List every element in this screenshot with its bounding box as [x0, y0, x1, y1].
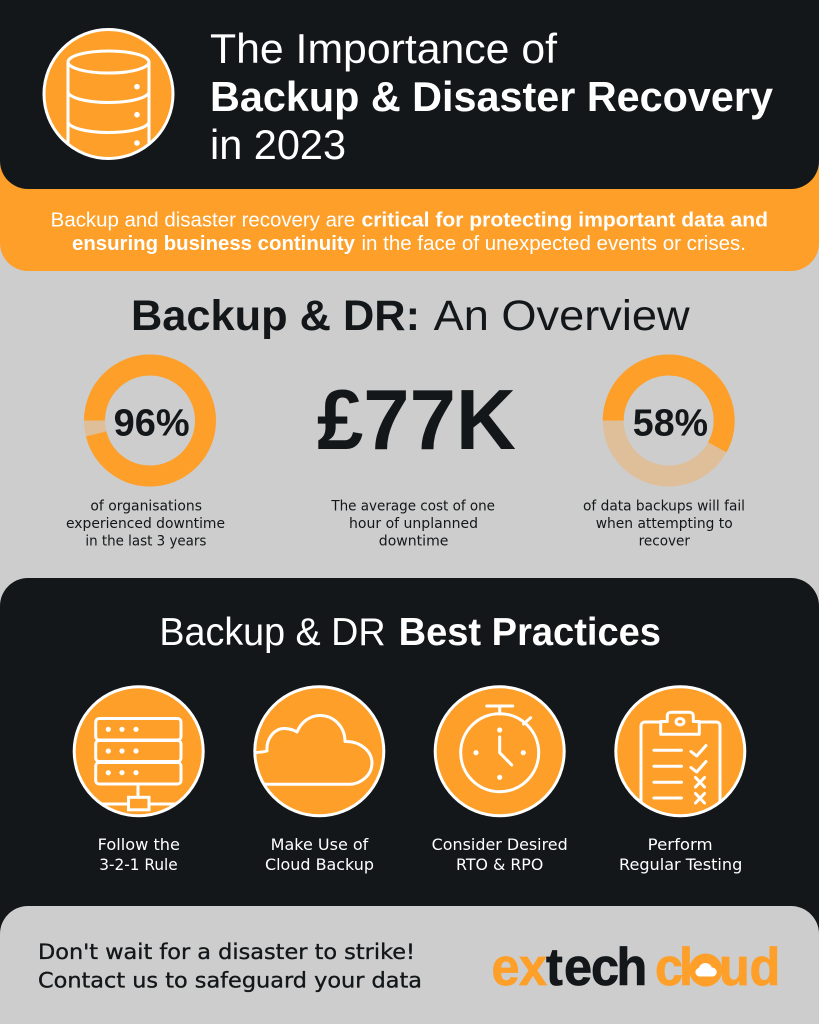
icon: database: [44, 30, 173, 160]
label: cloud backup: Cloud Backup: [265, 856, 374, 874]
caption: 96%: experienced downtime: [66, 516, 225, 532]
heading: overview: Backup & DR:: [131, 292, 420, 340]
label: regular testing: Regular Testing: [619, 856, 742, 874]
icon: logo cloud: [689, 954, 722, 986]
intro text: in the face of unexpected events or crises.: [362, 233, 746, 255]
panel: call to action: [0, 906, 819, 1024]
icon: server: [74, 687, 203, 816]
label: regular testing: [619, 836, 742, 874]
label: 3-2-1 rule: Follow the: [98, 836, 180, 854]
intro text: Backup and disaster recovery are: [51, 210, 355, 232]
logo: extech cloud: tech: [546, 937, 647, 996]
intro text: critical for protecting important data and: [362, 210, 768, 232]
logo: extech cloud: [492, 937, 780, 996]
caption: 58%: of data backups will fail: [583, 498, 745, 514]
title: [210, 25, 774, 168]
stat: 96% donut: 96%: [114, 402, 190, 444]
icon: cloud: [250, 687, 384, 816]
label: 3-2-1 rule: 3-2-1 Rule: [99, 856, 178, 874]
label: regular testing: Perform: [648, 836, 713, 854]
label: RTO and RPO: Consider Desired: [432, 836, 568, 854]
title: in 2023: [210, 121, 346, 168]
label: RTO and RPO: RTO & RPO: [456, 856, 543, 874]
label: RTO and RPO: [432, 836, 568, 874]
label: cloud backup: Make Use of: [271, 836, 369, 854]
caption: cost: downtime: [379, 534, 448, 550]
logo: extech cloud: cloud: [655, 937, 780, 996]
call to action text: Contact us to safeguard your data: [38, 968, 422, 992]
logo: extech cloud: ex: [492, 937, 547, 996]
intro text: [51, 210, 768, 255]
caption: cost: The average cost of one: [330, 498, 495, 514]
label: 3-2-1 rule: [98, 836, 180, 874]
title: The Importance of: [210, 25, 557, 72]
heading: best practices: Backup & DR: [159, 611, 386, 654]
call to action text: [38, 940, 422, 992]
caption: cost: [330, 498, 495, 550]
stat: 58% donut: 58%: [633, 402, 708, 444]
panel: intro band: [0, 140, 819, 271]
heading: best practices: [159, 611, 661, 654]
icon: clipboard: [616, 687, 745, 816]
heading: overview: An Overview: [434, 292, 691, 340]
heading: best practices: Best Practices: [399, 611, 661, 654]
caption: 58%: recover: [639, 534, 690, 550]
call to action text: Don't wait for a disaster to strike!: [38, 940, 415, 964]
caption: 96%: in the last 3 years: [85, 534, 206, 550]
caption: 58%: [583, 498, 745, 550]
caption: cost: hour of unplanned: [349, 516, 478, 532]
icon: stopwatch: [435, 687, 564, 816]
caption: 58%: when attempting to: [596, 516, 733, 532]
caption: 96%: of organisations: [90, 498, 202, 514]
heading: overview: [131, 292, 691, 340]
intro text: ensuring business continuity: [72, 233, 356, 255]
stat: 58% donut: [613, 365, 724, 476]
stat: 77K cost: £77K: [317, 373, 516, 468]
panel: header: [0, 0, 819, 189]
stat: 96% donut: [94, 365, 206, 476]
label: cloud backup: [265, 836, 374, 874]
panel: best practices: [0, 578, 819, 934]
title: Backup & Disaster Recovery: [210, 73, 774, 120]
caption: 96%: [66, 498, 225, 550]
